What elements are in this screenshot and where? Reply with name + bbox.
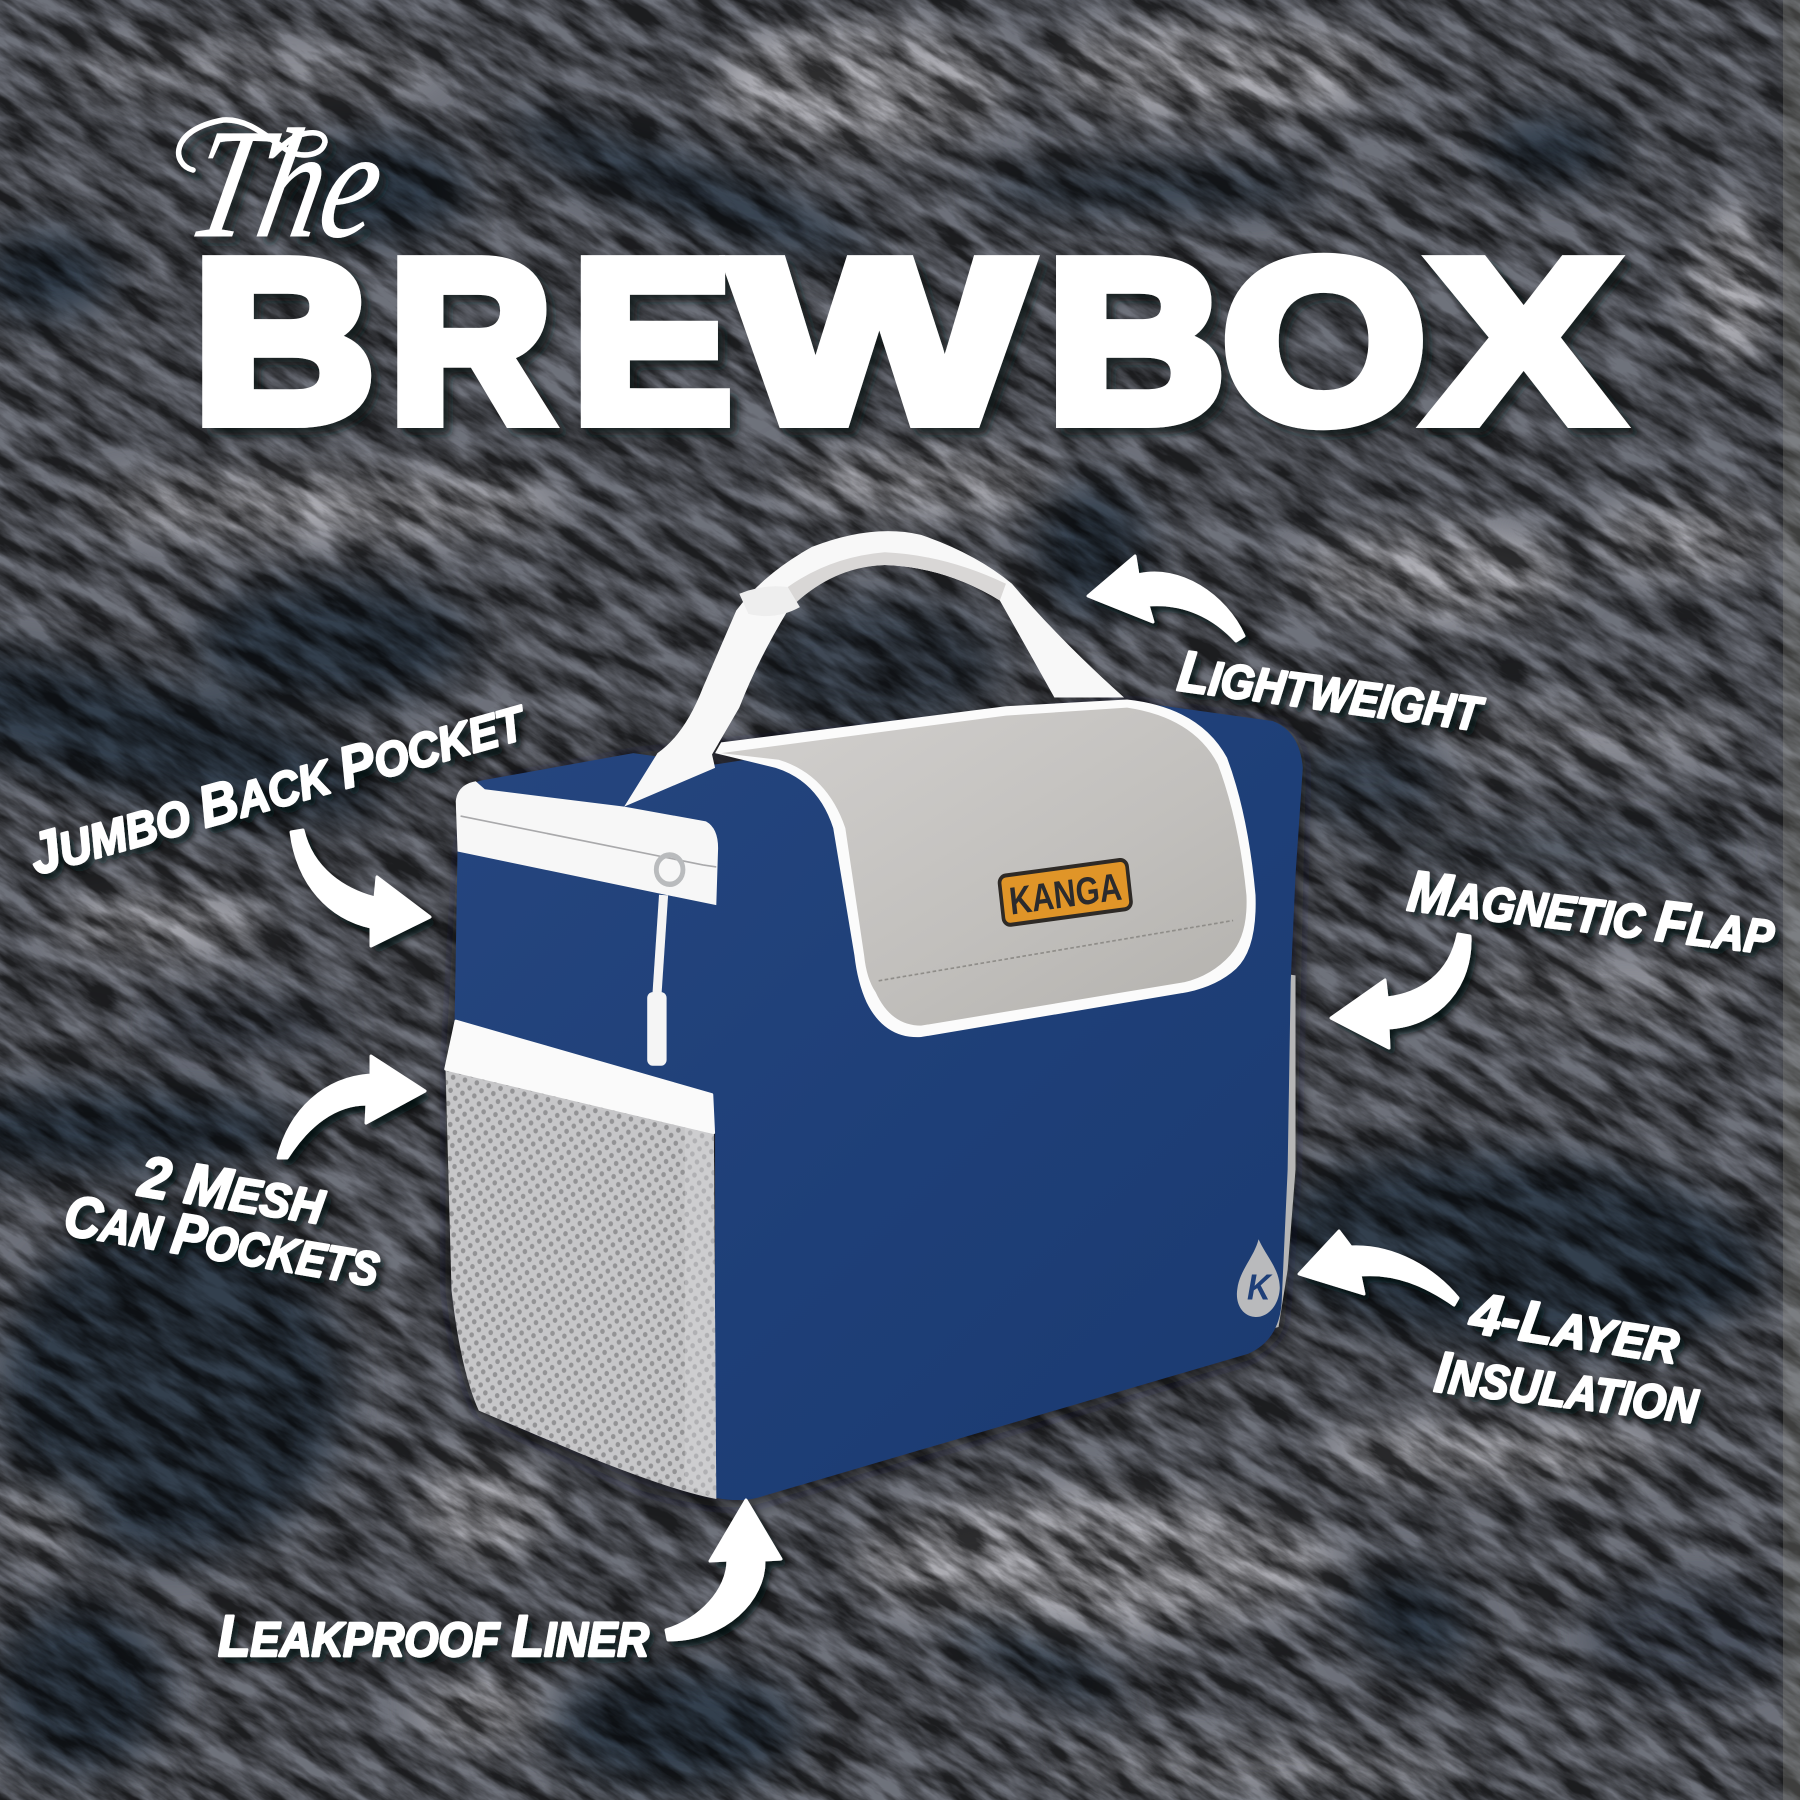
mesh can pocket [445, 1066, 716, 1499]
label: jumbo back pocket: JUMBO BACK POCKET [22, 687, 534, 888]
navy body [455, 701, 1303, 1500]
arrow: leakproof liner [666, 1500, 781, 1640]
k drop logo [1237, 1239, 1280, 1317]
arrow: 4-layer insulation [1299, 1231, 1458, 1305]
title: BREWBOX: O [1222, 212, 1426, 470]
callout: mesh can pockets [60, 1056, 425, 1299]
k drop logo: K [1247, 1268, 1273, 1308]
arrow: lightweight [1088, 556, 1244, 641]
title: BREWBOX: B [1047, 212, 1225, 470]
label: 2 mesh: 2 MESH [134, 1143, 330, 1237]
label: 4-layer: 4-LAYER [1465, 1280, 1684, 1377]
callout: leakproof liner [218, 1500, 781, 1669]
callout: magnetic flap [1331, 858, 1778, 1048]
label: leakproof liner: LEAKPROOF LINER [218, 1604, 649, 1669]
callout: lightweight [1088, 556, 1488, 744]
title: BREWBOX: X [1429, 212, 1618, 470]
label: lightweight: LIGHTWEIGHT [1174, 638, 1488, 744]
arrow: mesh can pockets [278, 1056, 425, 1158]
title: BREWBOX: R [389, 212, 552, 470]
title: The: The [177, 98, 398, 271]
arrow: magnetic flap [1331, 934, 1470, 1048]
title: BREWBOX: E [572, 212, 732, 470]
back panel sliver [1266, 972, 1296, 1330]
callout: jumbo back pocket [22, 687, 534, 946]
label: magnetic flap: MAGNETIC FLAP [1404, 858, 1778, 967]
label: insulation: INSULATION [1431, 1339, 1703, 1436]
handle [624, 531, 1124, 807]
Kanga patch logo: KANGA [1007, 864, 1124, 923]
title: BREWBOX [193, 212, 1618, 470]
title: BREWBOX: B [193, 212, 375, 470]
pocket binding [445, 1021, 714, 1133]
product: Brewbox cooler bag [445, 531, 1306, 1507]
title: BREWBOX: W [731, 212, 1028, 470]
zipper band [456, 781, 718, 905]
callout: 4-layer insulation [1299, 1231, 1703, 1436]
arrow: jumbo back pocket [291, 830, 430, 946]
zipper pull [647, 855, 683, 1066]
label: can pockets: CAN POCKETS [60, 1183, 384, 1299]
magnetic flap [715, 700, 1256, 1037]
